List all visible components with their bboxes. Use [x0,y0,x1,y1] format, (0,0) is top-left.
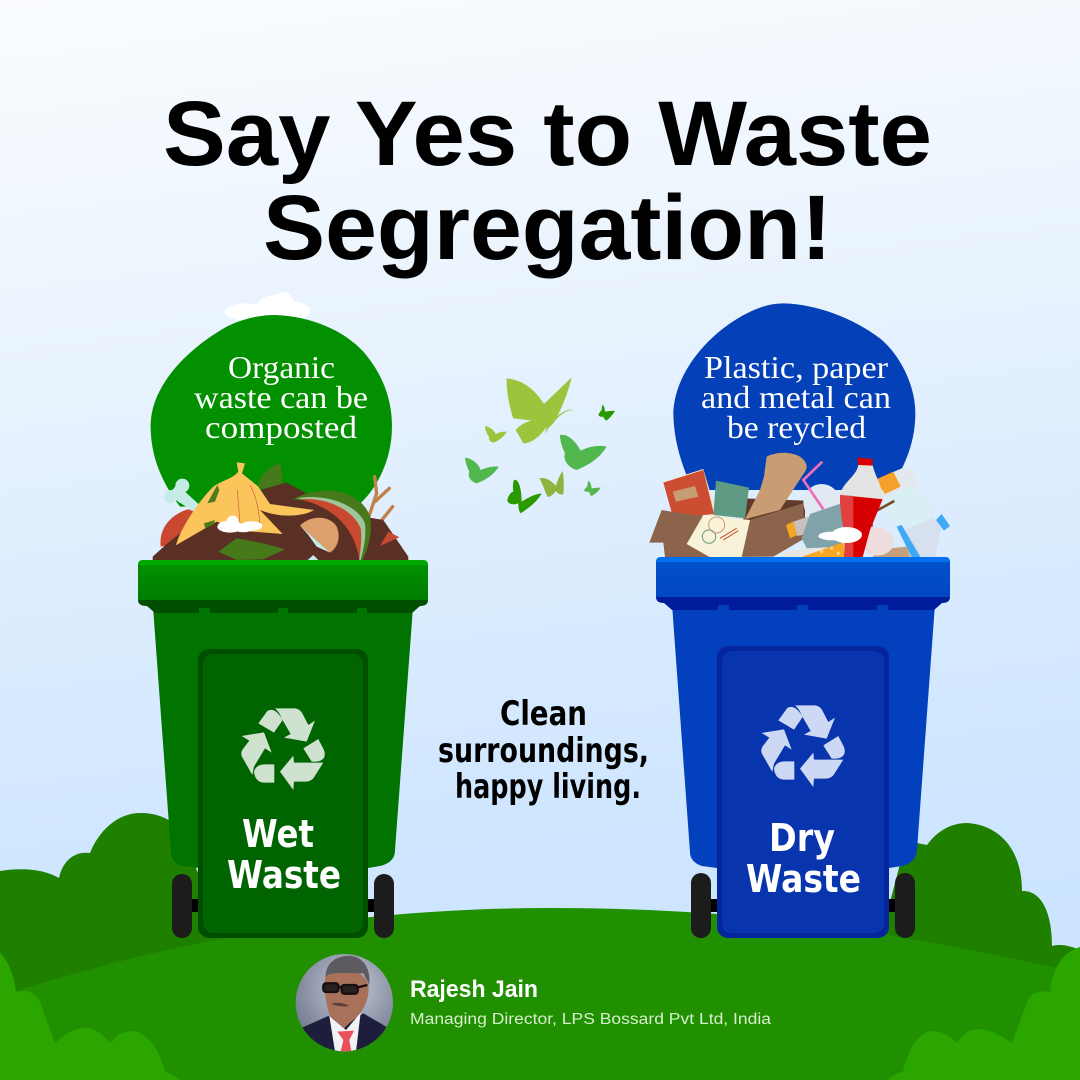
crumpled teal plastic [802,503,843,548]
large butterfly [507,377,572,443]
green book [713,481,749,518]
clear bag [883,486,933,530]
bone [164,479,205,515]
green bubble text [194,349,368,445]
title [163,83,932,279]
tray [782,540,847,557]
lid [138,560,428,626]
box interior [743,498,805,523]
loose sketch paper [687,515,750,557]
wheels and axle [691,873,915,938]
small orange tag [786,522,797,538]
compost pile [153,462,408,561]
bubble: organic waste [151,292,392,507]
blue bin [656,557,950,938]
presenter name: Rajesh Jain [410,976,538,1003]
tagline [438,694,649,807]
small butterflies [465,404,615,513]
blue bubble text [701,349,891,445]
tagline: Clean [500,694,587,734]
red soda bottle [840,458,883,557]
blue bubble text: be reycled [727,409,866,445]
wheels and axle [172,874,394,938]
takeaway cup and brown straw [861,501,911,557]
icon: recycling symbol blue [761,705,845,787]
paper roll [745,453,807,519]
label: dry waste [746,816,861,901]
white cloud on trash [818,527,862,543]
red scrap [160,509,207,547]
tagline: happy living. [455,767,641,807]
recyclable pile [649,453,950,557]
back hills [0,813,1080,1000]
top leaf [258,462,282,492]
twigs [368,477,393,522]
presenter role: Managing Director, LPS Bossard Pvt Ltd, India [410,1011,771,1028]
orange-labelled bottle [875,468,917,503]
label: dry waste: Dry [769,816,835,860]
label: dry waste: Waste [746,857,861,901]
blue bubble text: and metal can [701,379,891,415]
white cloud on compost [217,516,262,533]
orange dotted wrapper [801,542,845,557]
bin body [672,604,935,868]
green blob [151,315,392,507]
banana peel [176,462,314,545]
watermelon rind [293,491,371,561]
green bubble text: composted [205,409,357,445]
portrait photo [293,953,397,1053]
red book [663,469,717,520]
bin body [153,607,413,868]
blue bubble text: Plastic, paper [704,349,888,385]
bottom leaf [218,538,285,560]
label: wet waste: Wet [242,812,314,856]
bubble: recyclable waste [673,303,915,490]
eggshell [300,518,339,553]
front bushes [0,947,1080,1080]
front panel [717,646,889,938]
label: wet waste: Waste [227,853,341,897]
green bin [138,560,428,938]
clear water bottle [897,514,950,557]
cardboard box [649,503,805,557]
label: wet waste [227,812,341,897]
front panel [198,649,368,938]
icon: recycling symbol green [241,708,325,790]
tagline: surroundings, [438,731,649,771]
green bubble text: waste can be [194,379,368,415]
white cloud behind green bubble [225,292,310,321]
title: Say Yes to Waste [163,83,932,185]
lid [656,557,950,623]
main hill [0,908,1080,1080]
title: Segregation! [263,177,832,279]
butterflies [465,377,615,513]
green bubble text: Organic [228,349,335,385]
soil [153,483,408,561]
plastic cup [803,484,840,521]
red scrap right [380,532,399,546]
blue blob [673,303,915,490]
pink straw [803,462,823,509]
